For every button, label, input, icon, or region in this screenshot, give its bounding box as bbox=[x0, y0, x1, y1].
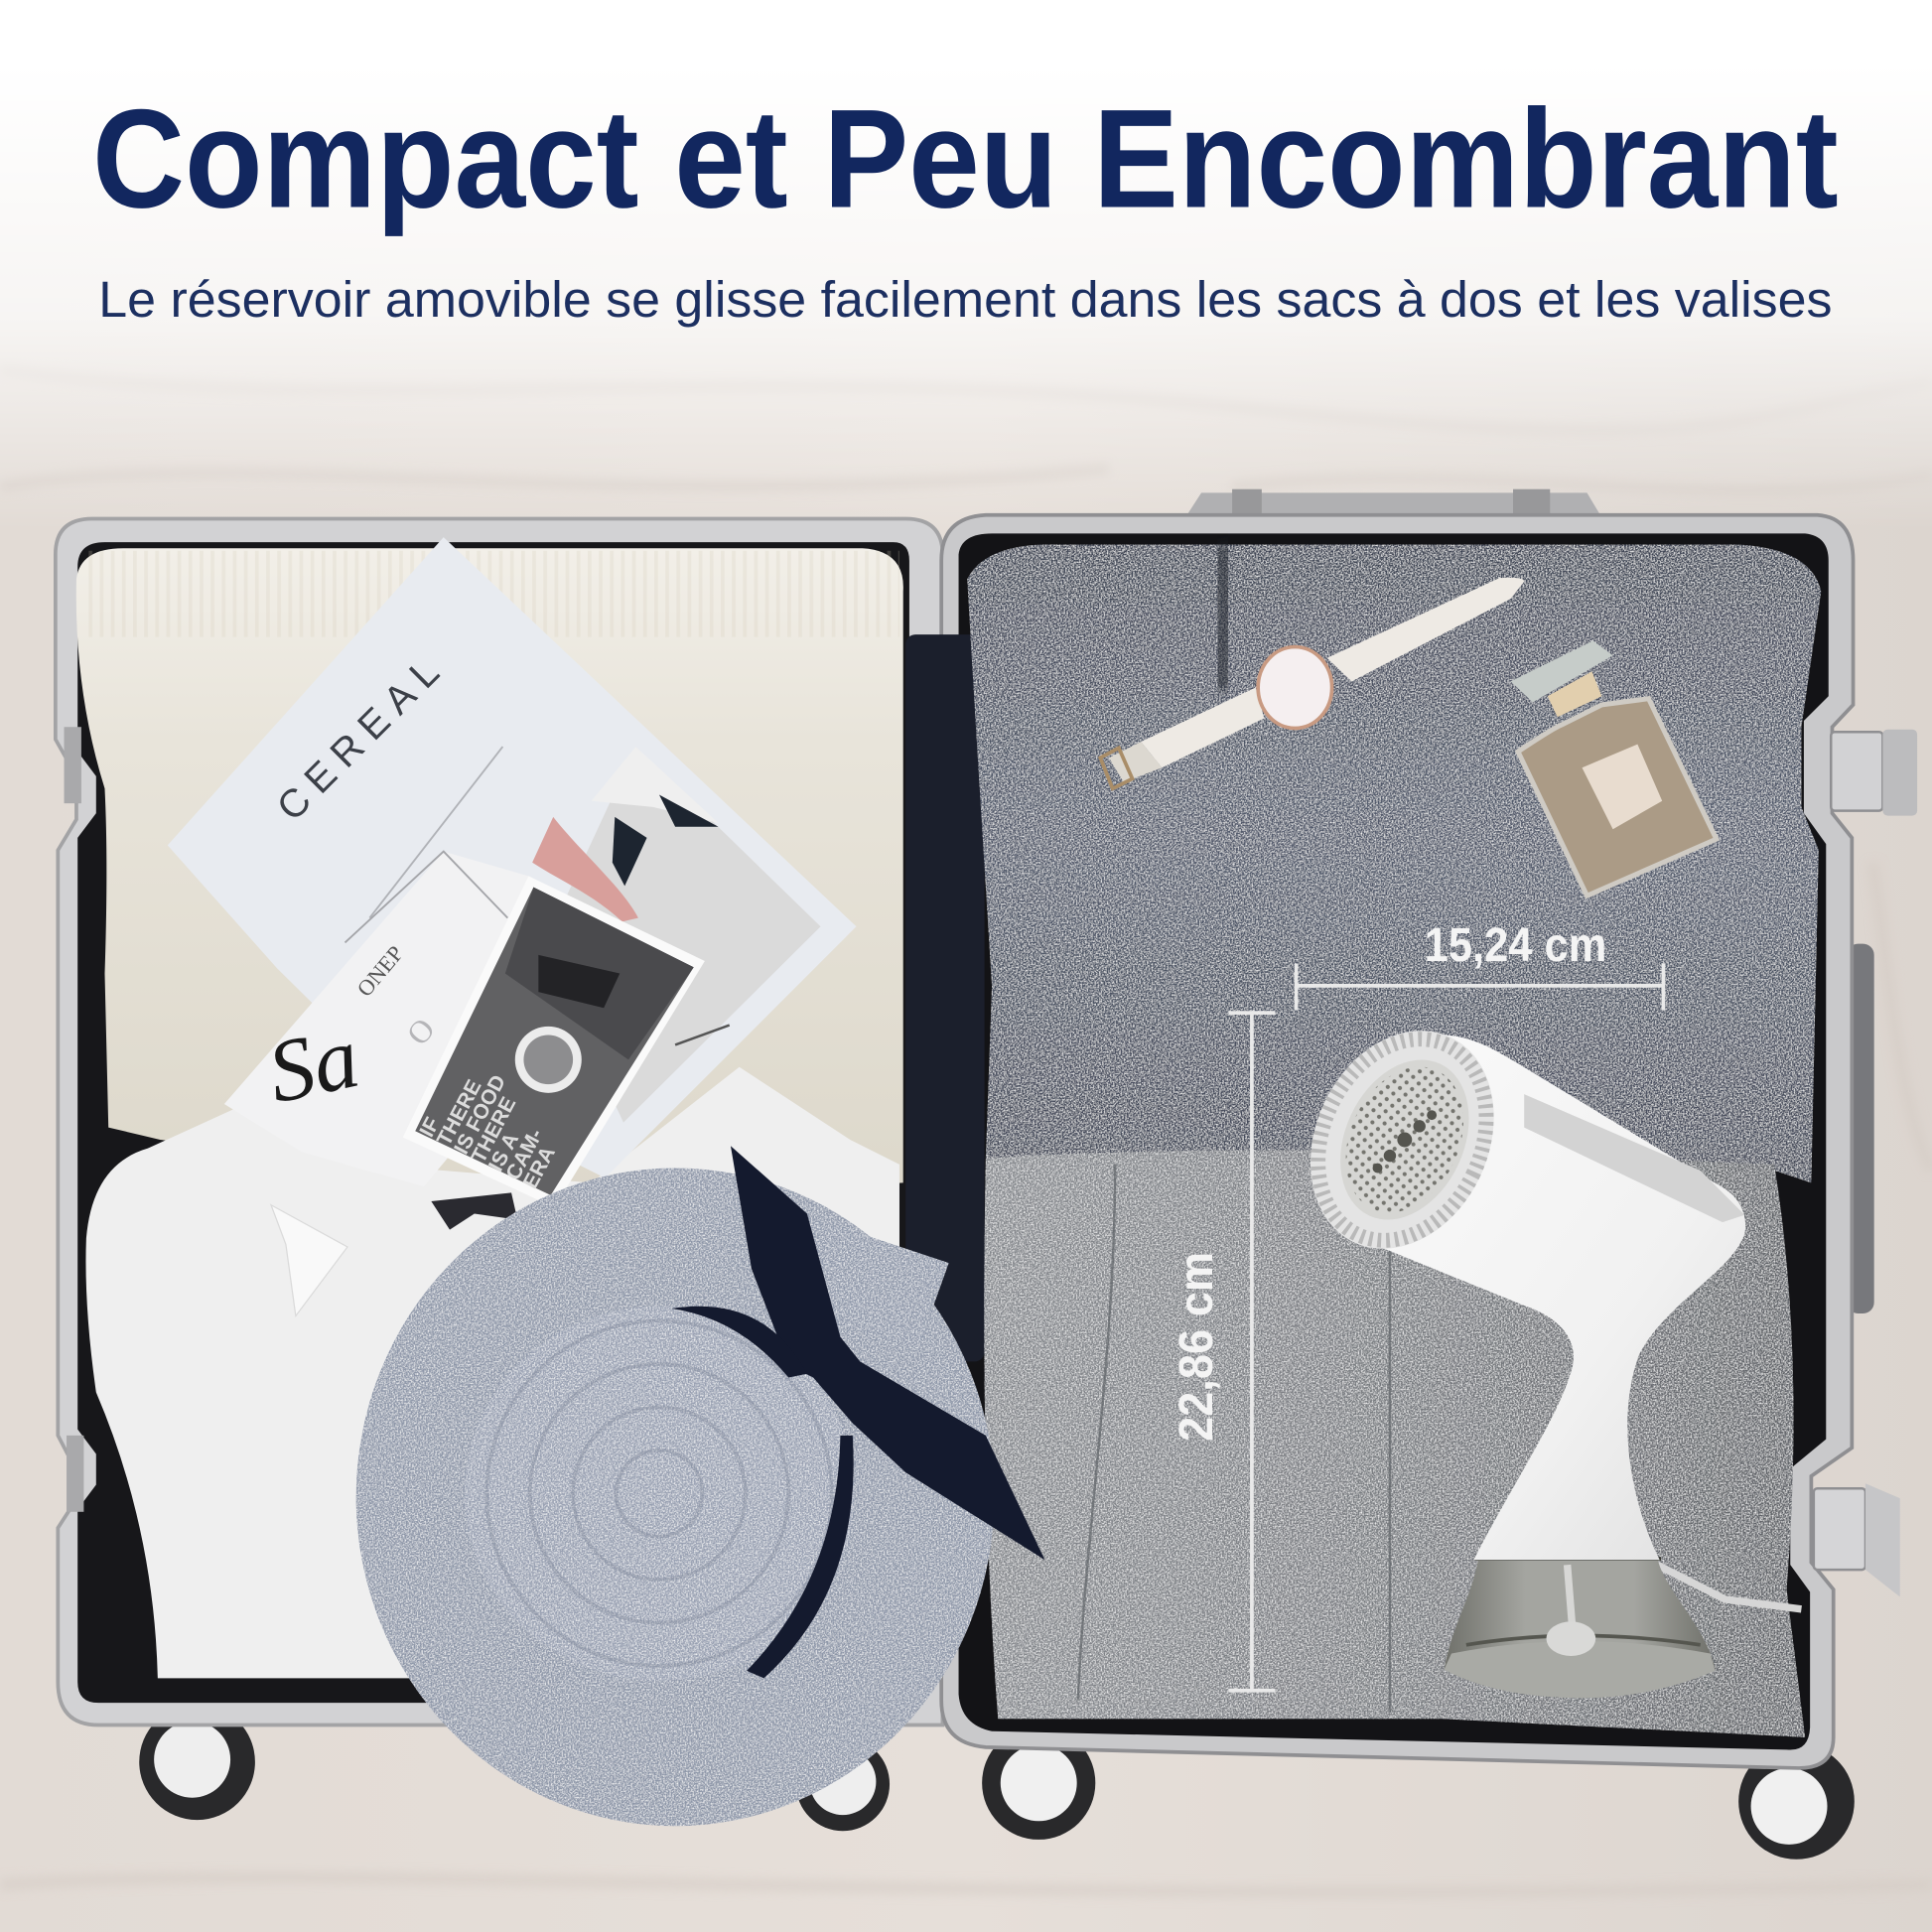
magazine bbox=[168, 537, 857, 1177]
white card: Sa bbox=[260, 1008, 367, 1122]
gray sweater bbox=[984, 1150, 1805, 1737]
left suitcase wheels bbox=[139, 1704, 890, 1831]
cream knit sweater bbox=[76, 548, 903, 1195]
white card: ONEP bbox=[352, 941, 408, 1001]
right suitcase wheels bbox=[982, 1726, 1855, 1860]
garment steamer bbox=[1276, 1001, 1801, 1698]
white jacket bbox=[85, 1067, 899, 1678]
steamer body bbox=[1380, 1035, 1745, 1560]
perfume bottle bbox=[1511, 640, 1717, 896]
transparent water tank bbox=[1445, 1558, 1716, 1698]
height dimension line bbox=[1170, 1013, 1276, 1691]
steamer stripe bbox=[1524, 1094, 1744, 1222]
postcard text: IS FOOD bbox=[450, 1071, 510, 1158]
central dark fold gasket bbox=[905, 634, 985, 1361]
magazine photo bbox=[532, 747, 821, 1123]
postcard text: IF bbox=[415, 1114, 445, 1141]
postcard text: THERE bbox=[468, 1093, 520, 1167]
postcard text: ERA bbox=[519, 1143, 560, 1192]
black and white postcard bbox=[403, 876, 705, 1207]
right suitcase latches bbox=[1814, 730, 1917, 1596]
white card bbox=[224, 852, 592, 1186]
left suitcase latches bbox=[65, 727, 83, 1512]
wrist watch bbox=[1100, 578, 1524, 788]
right suitcase shell bbox=[941, 515, 1854, 1768]
width dimension line bbox=[1297, 918, 1663, 1011]
postcard text: IS A bbox=[484, 1130, 523, 1175]
hat ribbon bbox=[671, 1146, 1044, 1678]
postcard text: THERE bbox=[433, 1076, 486, 1150]
blue-gray sweater bbox=[967, 544, 1821, 1182]
width label: 15,24 cm bbox=[1425, 918, 1606, 972]
steamer head bbox=[1276, 1001, 1528, 1279]
postcard text bbox=[415, 1071, 560, 1192]
postcard text: CAM- bbox=[501, 1125, 548, 1184]
height label: 22,86 cm bbox=[1170, 1252, 1223, 1442]
left suitcase shell bbox=[56, 518, 942, 1725]
subtitle: Le réservoir amovible se glisse facilement dans les sacs à dos et les valises bbox=[98, 271, 1832, 328]
woven straw hat bbox=[356, 1146, 1044, 1826]
magazine heading: CEREAL bbox=[269, 650, 448, 829]
right suitcase handle bbox=[1185, 489, 1874, 1313]
power cord bbox=[1657, 1565, 1801, 1609]
white card: O bbox=[399, 1011, 442, 1051]
